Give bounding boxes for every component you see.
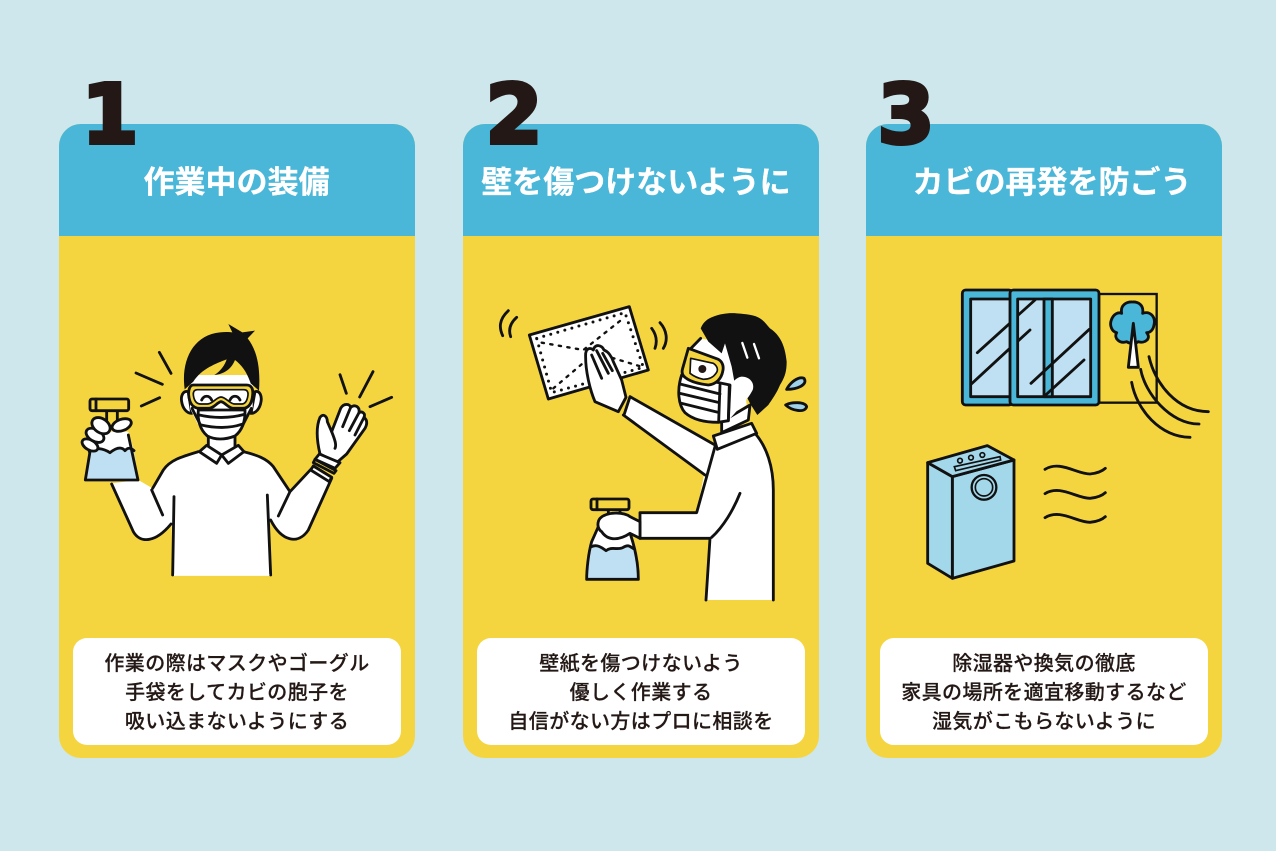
- description text 3: 家具の場所を適宜移動するなど: [901, 681, 1187, 704]
- hand gripping bottle: [80, 414, 133, 454]
- neck and collar: [199, 433, 244, 463]
- hand gripping bottle: [598, 513, 640, 539]
- heading 1: 作業中の装備: [144, 165, 330, 200]
- number 1: 1: [81, 68, 139, 163]
- description text 2: 優しく作業する: [570, 681, 712, 704]
- description text 2: 壁紙を傷つけないよう: [539, 652, 743, 675]
- illustration: person wiping wallpaper: [500, 307, 807, 600]
- panel: step 2 protect wall: [463, 68, 819, 758]
- description text 1: 手袋をしてカビの胞子を: [125, 681, 349, 704]
- illustration: person with spray and gloves: [80, 324, 392, 575]
- heading 2: 壁を傷つけないように: [481, 165, 791, 200]
- goggles side view: [682, 348, 723, 385]
- description box 2: [477, 638, 805, 745]
- sparkle lines: [136, 352, 392, 407]
- goggles: [189, 385, 253, 408]
- window right pane: [1010, 290, 1099, 405]
- number 3: 3: [877, 68, 935, 163]
- wallpaper sheet: [529, 307, 648, 399]
- description text 1: 吸い込まないようにする: [125, 710, 349, 733]
- outside frame: [1098, 294, 1157, 403]
- card background 3: [866, 124, 1222, 758]
- spray bottle: [587, 499, 638, 579]
- illustration: window and dehumidifier: [928, 290, 1208, 578]
- description text 2: 自信がない方はプロに相談を: [508, 710, 774, 733]
- description box 3: [880, 638, 1208, 745]
- spray bottle: [85, 399, 138, 480]
- panel: step 1 equipment: [59, 68, 415, 758]
- body: [112, 452, 332, 575]
- header band 2: [463, 124, 819, 236]
- header band 3: [866, 124, 1222, 236]
- dehumidifier: [928, 446, 1014, 578]
- sweat drops: [786, 378, 807, 411]
- gloved hand on sheet: [586, 346, 626, 412]
- mask: [192, 408, 251, 439]
- description text 3: 除湿器や換気の徹底: [952, 652, 1136, 675]
- heading 3: カビの再発を防ごう: [912, 165, 1192, 200]
- card background 2: [463, 124, 819, 758]
- mask side view: [679, 375, 730, 422]
- head: [680, 313, 787, 449]
- icon: tree: [1111, 302, 1154, 367]
- description text 3: 湿気がこもらないように: [932, 710, 1156, 733]
- coat and arms: [623, 397, 773, 600]
- description box 1: [73, 638, 401, 745]
- wind lines: [1132, 357, 1208, 437]
- humidity wave lines: [1045, 466, 1105, 522]
- description text 1: 作業の際はマスクやゴーグル: [104, 651, 370, 675]
- number 2: 2: [485, 68, 543, 163]
- head: [181, 324, 261, 436]
- gloved hand: [311, 404, 367, 482]
- header band 1: [59, 124, 415, 236]
- window left pane: [962, 290, 1012, 405]
- motion lines: [500, 311, 666, 348]
- card background 1: [59, 124, 415, 758]
- panel: step 3 prevent recurrence: [866, 68, 1222, 758]
